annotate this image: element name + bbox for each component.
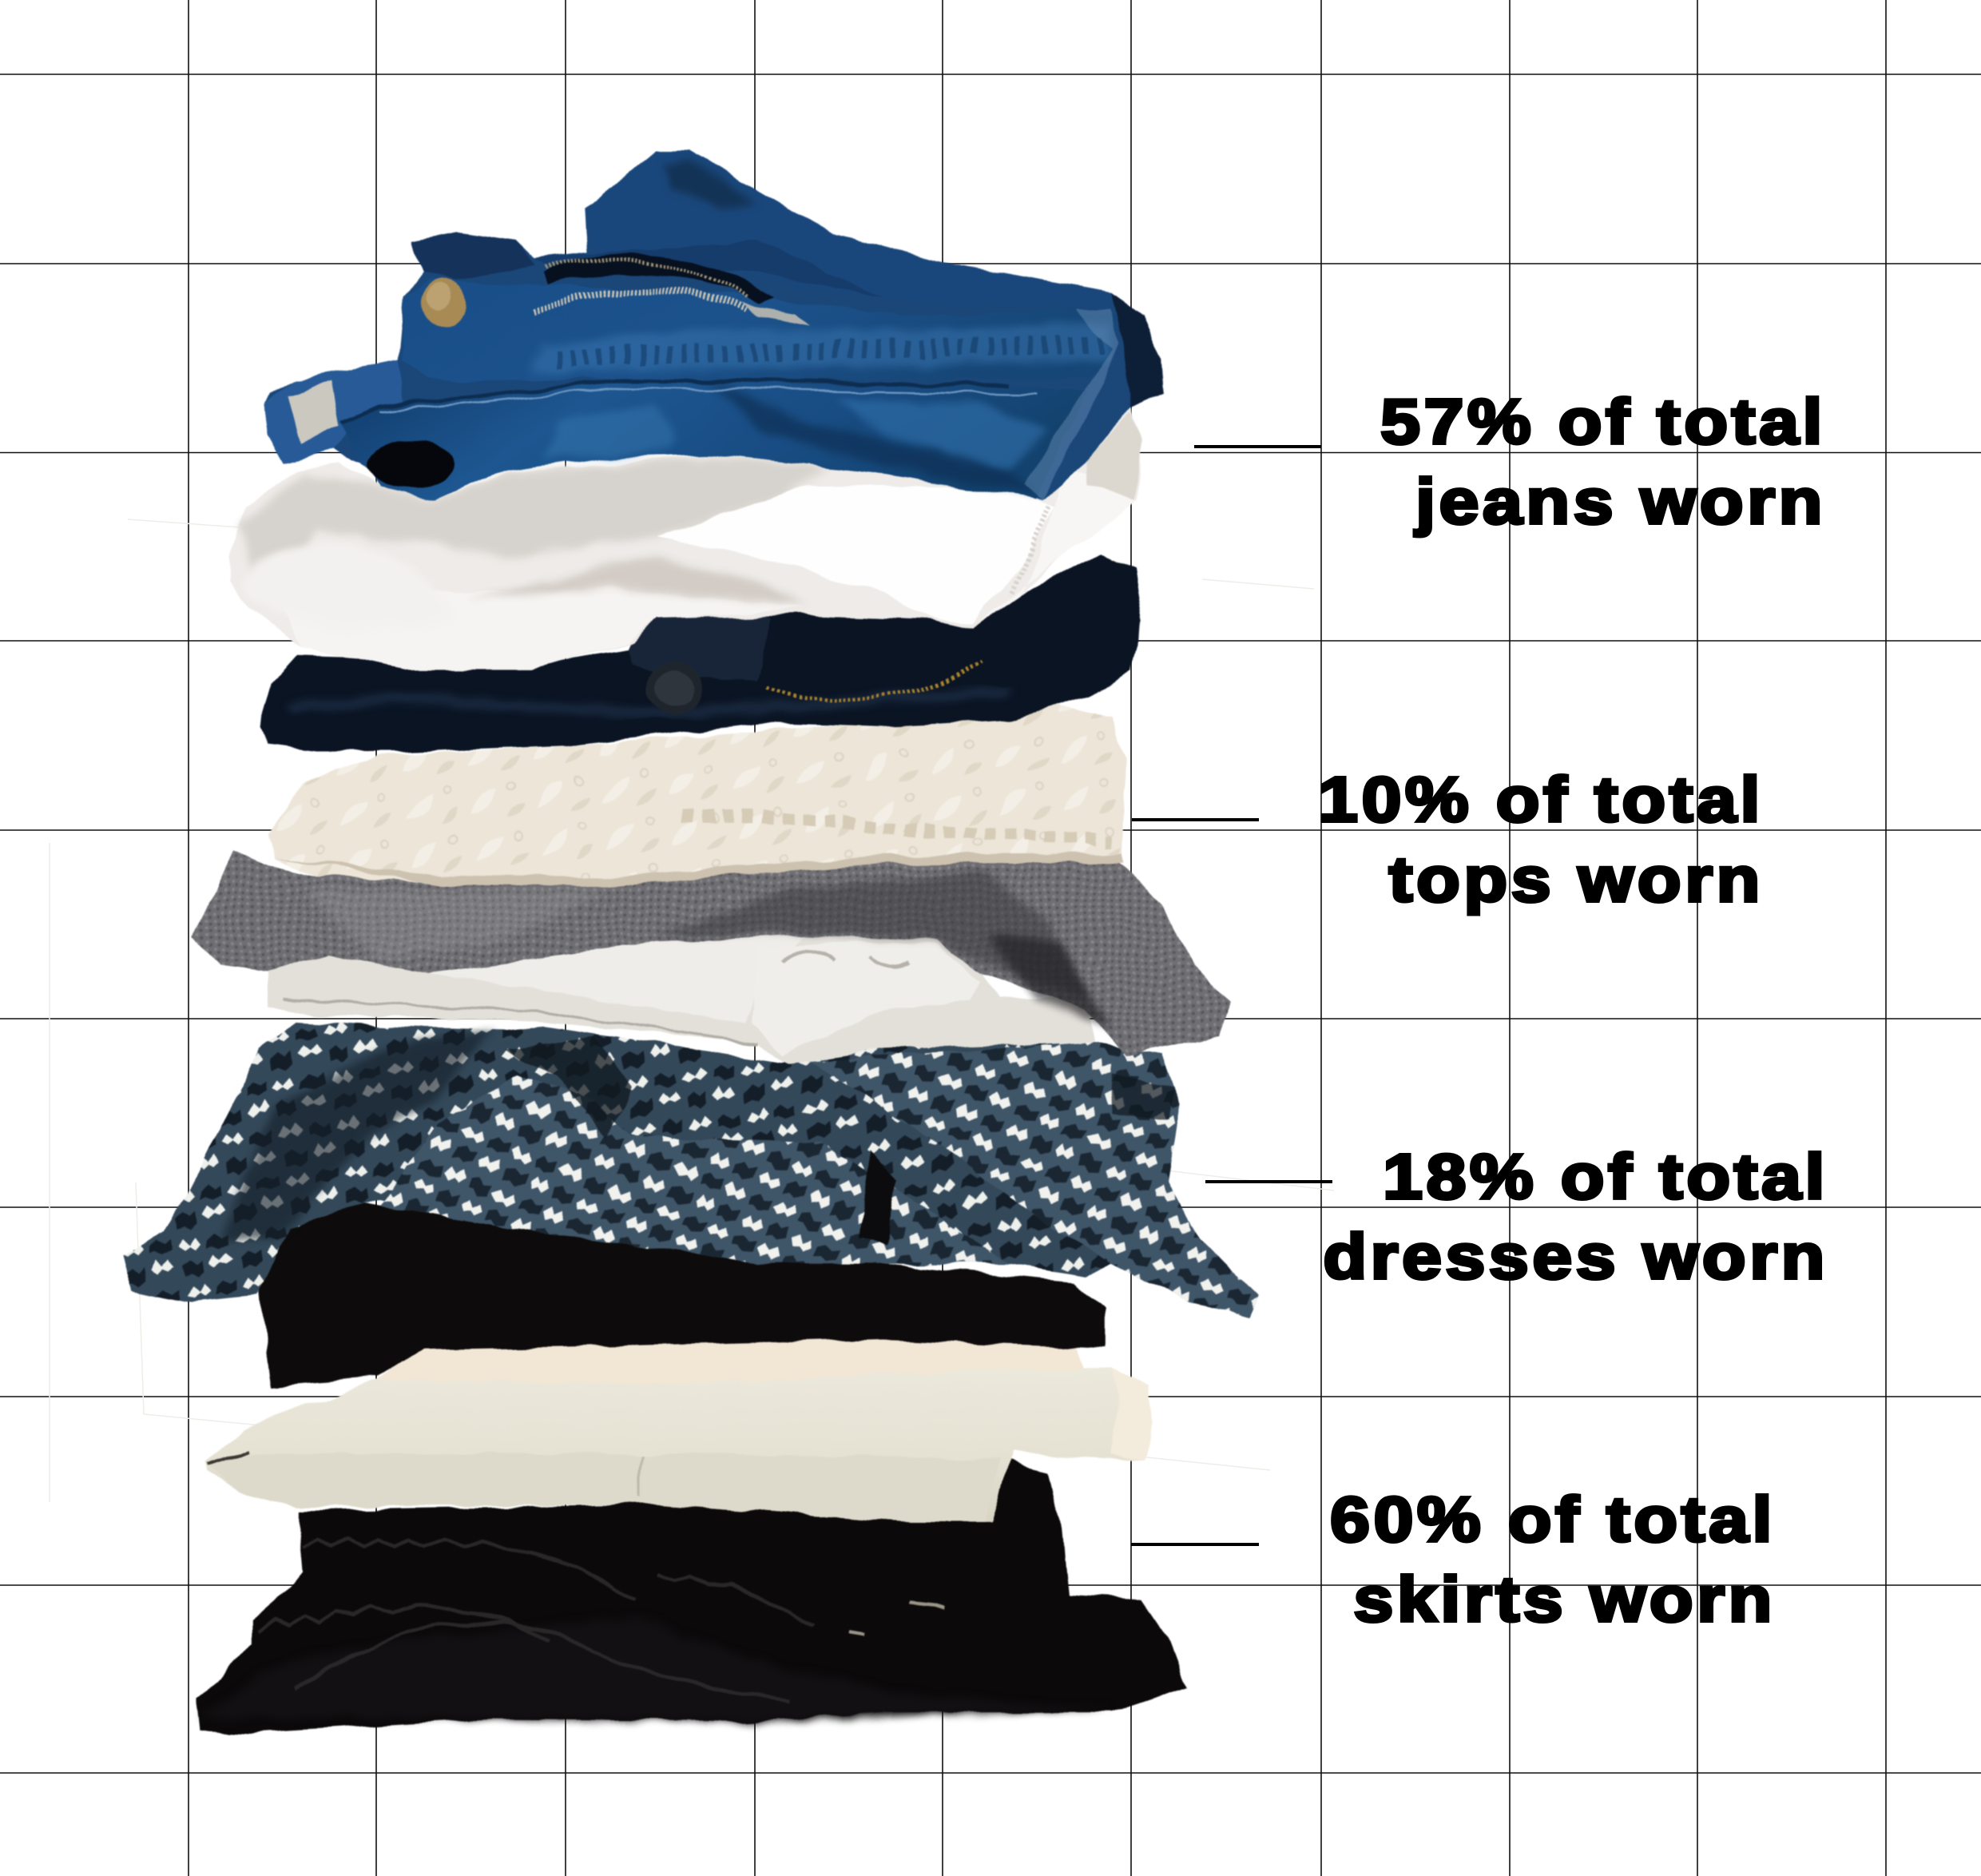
label: jeans: 57% of total [1380,385,1826,457]
gray knit top [192,849,1232,1055]
leader line: skirts [1131,1543,1259,1546]
white top [265,932,1093,1064]
leader line: jeans [1194,445,1321,448]
label: jeans [1380,385,1826,537]
blue jeans [264,149,1165,499]
label: skirts [1330,1483,1776,1635]
label: dresses: 18% of total [1383,1140,1828,1212]
lace top [268,705,1127,887]
label: tops: 10% of total [1318,763,1764,835]
black skirts, bottom layer [198,1460,1188,1734]
label: skirts: 60% of total [1330,1483,1776,1555]
patterned dress [122,1021,1257,1317]
white jeans [230,404,1141,670]
label: tops [1318,763,1764,915]
label: tops: tops worn [1389,843,1764,915]
label: dresses [1323,1140,1828,1292]
leader line: tops [1132,818,1259,821]
label: dresses: dresses worn [1323,1220,1828,1292]
cream leather skirts [206,1321,1152,1523]
clothing stack [122,149,1257,1734]
dark jeans [259,554,1145,752]
label: skirts: skirts worn [1354,1563,1776,1635]
black dress [259,1201,1104,1386]
label: jeans: jeans worn [1414,465,1826,537]
leader line: dresses [1205,1180,1332,1183]
